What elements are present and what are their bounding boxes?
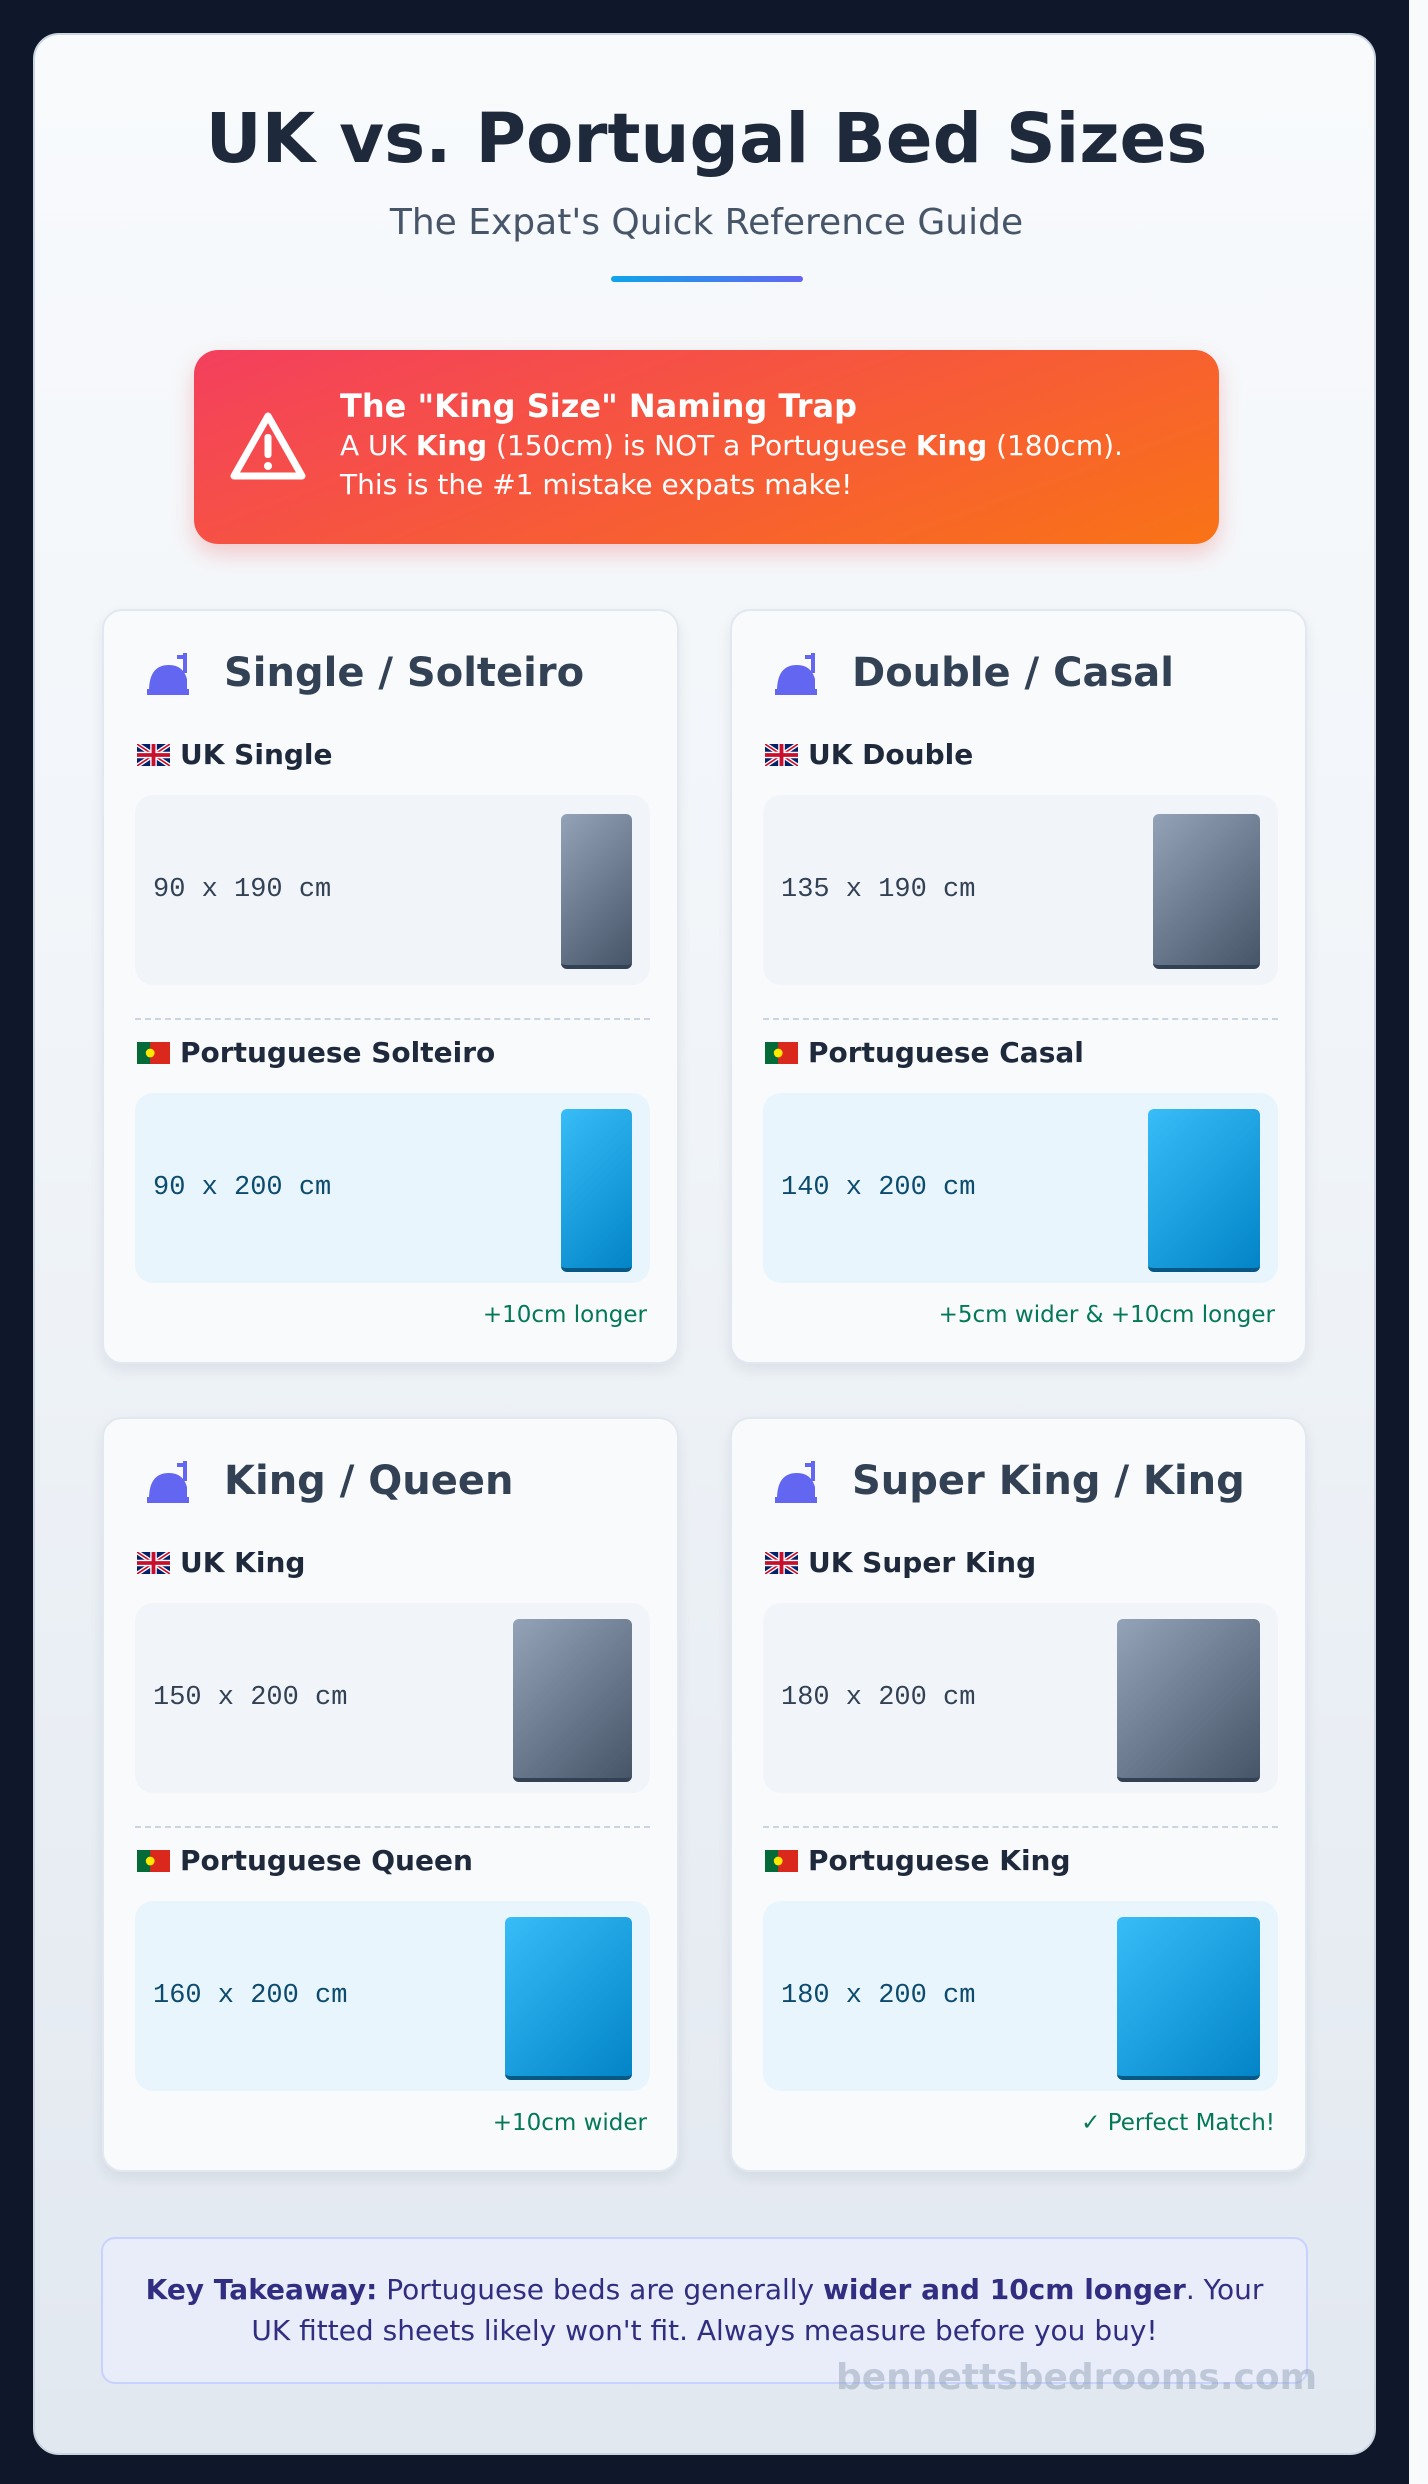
title: UK vs. Portugal Bed Sizes [206,99,1207,179]
note: ✓ Perfect Match! [1081,2110,1275,2136]
alert text: The "King Size" Naming Trap [340,387,857,425]
label uk: UK Single [180,738,333,771]
uk size box: 135 x 190 cm [781,875,975,905]
key takeaway [101,2237,1308,2384]
icon: bed [775,1461,817,1503]
alert text: A UK King (150cm) is NOT a Portuguese King (180cm). [340,429,1123,462]
pt size box: 90 x 200 cm [153,1173,331,1203]
icon: bed [147,1461,189,1503]
heading: Double / Casal [852,650,1174,696]
label uk: UK Super King [808,1546,1036,1579]
note: +5cm wider & +10cm longer [939,1302,1275,1328]
uk size box [135,1603,650,1793]
key takeaway: UK fitted sheets likely won't fit. Always measure before you buy! [251,2314,1158,2347]
label pt: Portuguese Casal [808,1036,1084,1069]
label uk: UK Double [808,738,973,771]
watermark: bennettsbedrooms.com [836,2357,1317,2398]
icon: warning [230,412,306,480]
pt size box [135,1093,650,1283]
label pt: Portuguese Solteiro [180,1036,495,1069]
panel: super king [730,1417,1307,2172]
note: +10cm wider [493,2110,647,2136]
panel: king/queen [102,1417,679,2172]
alert banner [194,350,1219,544]
subtitle: The Expat's Quick Reference Guide [390,202,1023,243]
label pt: Portuguese Queen [180,1844,473,1877]
pt size box: 140 x 200 cm [781,1173,975,1203]
panel: single [102,609,679,1364]
pt size box [763,1093,1278,1283]
heading: Super King / King [852,1458,1245,1504]
heading: Single / Solteiro [224,650,584,696]
heading: King / Queen [224,1458,514,1504]
uk size box [763,795,1278,985]
label pt: Portuguese King [808,1844,1071,1877]
uk size box: 180 x 200 cm [781,1683,975,1713]
pt size box: 160 x 200 cm [153,1981,347,2011]
label uk: UK King [180,1546,305,1579]
panel: double [730,609,1307,1364]
uk size box: 90 x 190 cm [153,875,331,905]
note: +10cm longer [483,1302,647,1328]
uk size box [135,795,650,985]
accent bar [611,276,803,282]
uk size box [763,1603,1278,1793]
icon: bed [775,653,817,695]
pt size box: 180 x 200 cm [781,1981,975,2011]
key takeaway: Key Takeaway: Portuguese beds are generally wider and 10cm longer. Your [146,2273,1263,2306]
alert text [340,387,1123,501]
pt size box [135,1901,650,2091]
icon: bed [147,653,189,695]
uk size box: 150 x 200 cm [153,1683,347,1713]
alert text: This is the #1 mistake expats make! [340,468,852,501]
pt size box [763,1901,1278,2091]
